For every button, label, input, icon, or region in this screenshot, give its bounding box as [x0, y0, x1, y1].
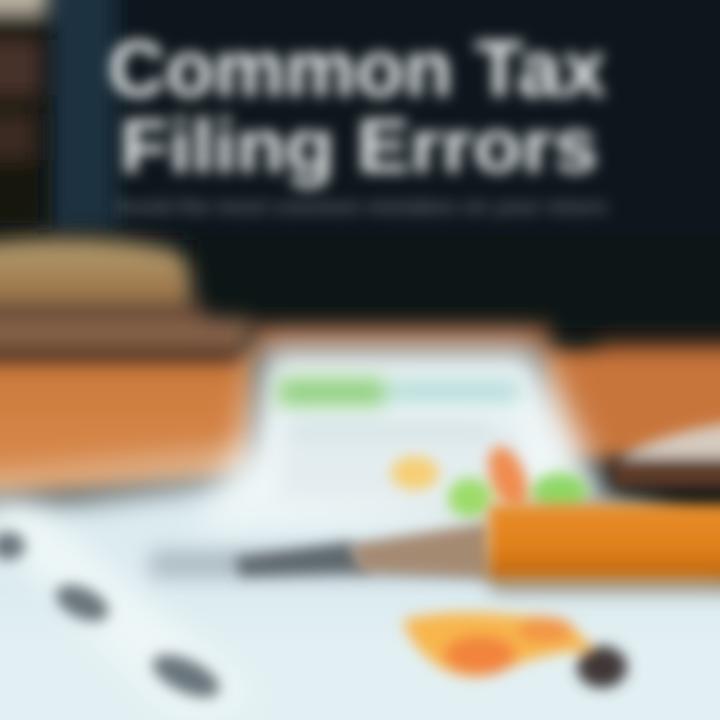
- document marks: coloured highlights: [391, 441, 588, 518]
- lower sheet dashes: [0, 532, 225, 706]
- document body tint: [280, 420, 520, 500]
- icon: object at right edge: [612, 420, 720, 488]
- icon: stack of books: [0, 238, 250, 362]
- panel: blue board edge: [48, 0, 720, 335]
- panel: paper base at bottom: [0, 600, 720, 720]
- panel: lower paper sheet: [0, 475, 720, 720]
- panel: wooden table: [0, 325, 720, 500]
- pencil graphite tip: [235, 542, 370, 576]
- pencil wood cone: [350, 522, 490, 578]
- title: Common Tax Filing Errors: [108, 24, 606, 189]
- document heading: green and blue bars: [278, 378, 520, 435]
- lower sheet pale diagonal streak: [0, 500, 260, 720]
- title: Common Tax Filing Errors: Common Tax: [108, 24, 606, 113]
- icon: pencil: [150, 504, 720, 591]
- icon: orange ink smudge: [403, 613, 627, 688]
- title: Common Tax Filing Errors: Filing Errors: [120, 104, 598, 189]
- pencil body: [488, 504, 720, 580]
- panel: top-left brown shelf: [0, 0, 48, 230]
- panel: tax document: [195, 345, 610, 535]
- subtitle line: Avoid the most common mistakes on your return: [115, 194, 607, 219]
- pencil tip shadow: [150, 550, 720, 591]
